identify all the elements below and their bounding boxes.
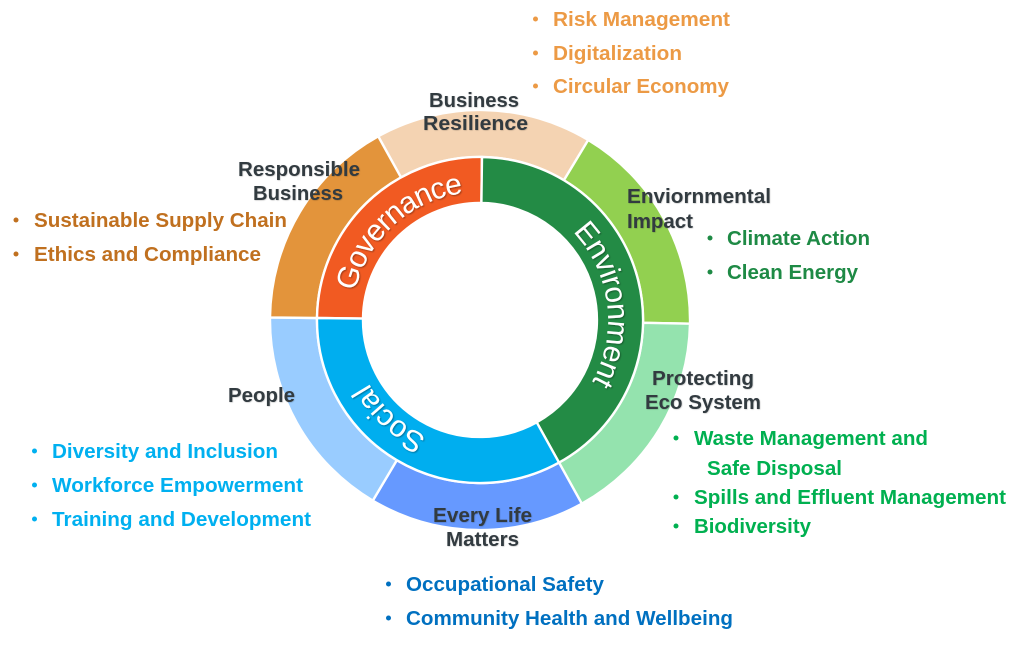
list: Business Resilience topics: [533, 8, 730, 98]
segment label: Business Resilience: Business: [429, 90, 519, 112]
list: Protecting Eco System topics: Biodiversity: [694, 515, 812, 538]
outer segment: Protecting Eco System: [559, 323, 690, 504]
segment label: Responsible Business: Responsible: [238, 159, 360, 181]
list: Protecting Eco System topics: [674, 427, 1006, 538]
list: People topics: Training and Development: [52, 508, 311, 531]
inner segment: Governance: [317, 157, 482, 319]
list: Responsible Business topics: [14, 209, 287, 266]
curved label: Governance: Governance: [338, 178, 462, 290]
segment label: Business Resilience: Resilience: [423, 113, 528, 135]
inner segment: Social: [317, 318, 559, 483]
segment label: Every Life Matters: Matters: [446, 529, 519, 551]
outer segment: Environmental Impact: [564, 140, 690, 324]
list: Environmental Impact topics: [708, 227, 870, 284]
curved label: Social: Social: [351, 384, 425, 454]
list: Protecting Eco System topics: Safe Disposal: [707, 457, 842, 480]
segment label: Protecting Eco System: Protecting: [652, 368, 754, 390]
list: Responsible Business topics: Ethics and Compliance: [34, 243, 261, 266]
segment label: Enviornmental Impact: [627, 186, 771, 233]
list: People topics: [32, 440, 311, 531]
segment label: Every Life Matters: Every Life: [433, 505, 532, 527]
segment label: Responsible Business: Business: [253, 183, 343, 205]
list: People topics: Diversity and Inclusion: [52, 440, 278, 463]
list: Protecting Eco System topics: Spills and Effluent Management: [694, 486, 1006, 509]
list: Protecting Eco System topics: Waste Management and: [694, 427, 928, 450]
segment label: Enviornmental Impact: Impact: [627, 211, 693, 233]
list: Every Life Matters topics: [386, 573, 733, 630]
segment label: People: People: [228, 385, 295, 407]
inner segment: Environment: [481, 157, 643, 463]
list: Business Resilience topics: Risk Management: [553, 8, 730, 31]
outer segment: People: [270, 317, 397, 501]
donut chart: [270, 110, 690, 530]
list: Every Life Matters topics: Community Health and Wellbeing: [406, 607, 733, 630]
list: Business Resilience topics: Digitalization: [553, 42, 682, 65]
list: Every Life Matters topics: Occupational Safety: [406, 573, 605, 596]
list: Environmental Impact topics: Climate Action: [727, 227, 870, 250]
segment label: Enviornmental Impact: Enviornmental: [627, 186, 771, 208]
segment label: Every Life Matters: [433, 505, 532, 551]
segment label: Business Resilience: [423, 90, 528, 135]
list: Responsible Business topics: Sustainable Supply Chain: [34, 209, 287, 232]
outer segment: Responsible Business: [270, 136, 401, 318]
segment label: Responsible Business: [238, 159, 360, 205]
outer segment: Every Life Matters: [373, 460, 582, 530]
curved label: Environment: Environment: [574, 220, 626, 390]
segment label: Protecting Eco System: [645, 368, 761, 414]
list: Business Resilience topics: Circular Economy: [553, 75, 730, 98]
outer segment: Business Resilience: [378, 110, 588, 180]
list: Environmental Impact topics: Clean Energy: [727, 261, 859, 284]
segment label: Protecting Eco System: Eco System: [645, 392, 761, 414]
list: People topics: Workforce Empowerment: [52, 474, 303, 497]
